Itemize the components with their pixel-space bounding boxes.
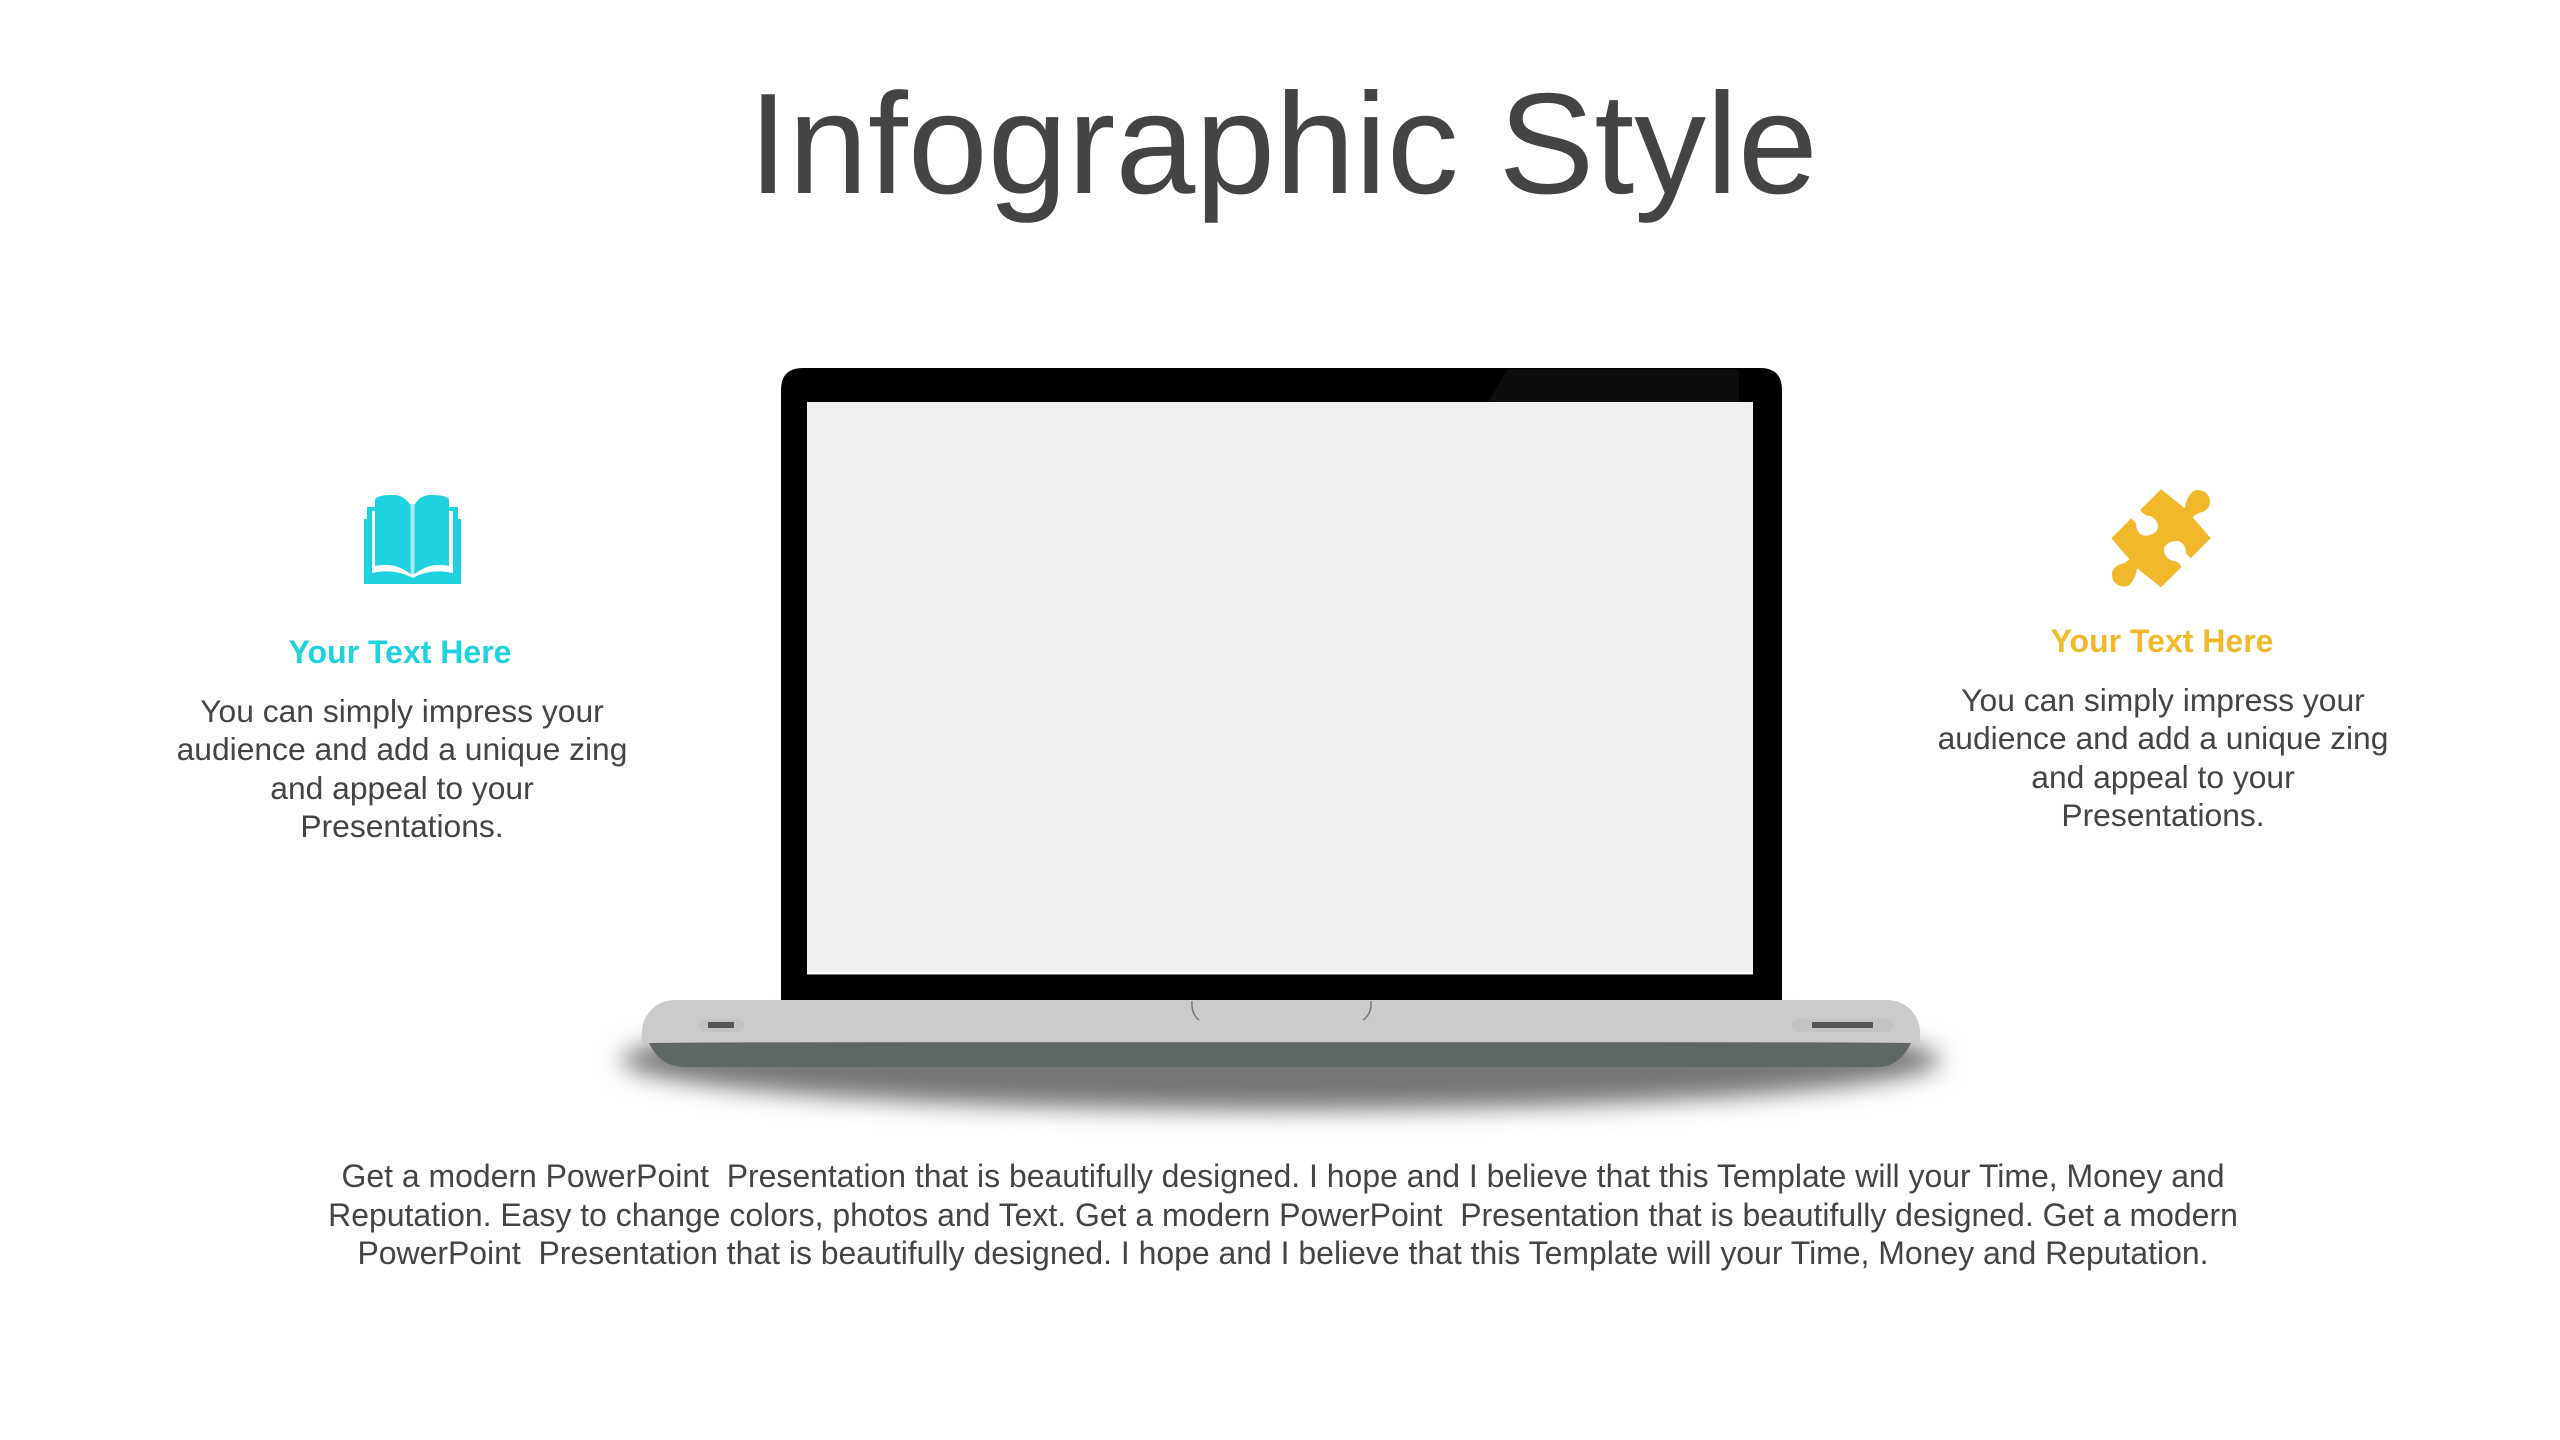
icon: puzzle piece [2111, 489, 2211, 587]
laptop shadow [621, 1010, 1941, 1110]
laptop bezel [781, 368, 1782, 1001]
bezel reflection [1488, 369, 1739, 402]
left text block: Presentations. [300, 808, 504, 844]
bottom text block: PowerPoint Presentation that is beautifully designed. I hope and I believe that this Template will your Time, Money and Reputation. [357, 1235, 2209, 1271]
right port [1792, 1019, 1893, 1032]
left panel [177, 495, 627, 844]
bottom text block: Reputation. Easy to change colors, photos and Text. Get a modern PowerPoint Presentation that is beautifully designed. Get a modern [328, 1197, 2238, 1233]
laptop base top [642, 1000, 1920, 1042]
left text block: You can simply impress your [200, 693, 604, 729]
right text block: You can simply impress your [1961, 682, 2365, 718]
right text block: and appeal to your [2031, 759, 2295, 795]
bottom text block [328, 1158, 2238, 1271]
laptop illustration [621, 368, 1941, 1110]
left text block [177, 693, 627, 844]
left text block: and appeal to your [270, 770, 534, 806]
laptop screen [807, 402, 1753, 975]
right panel [1938, 489, 2388, 833]
icon: open book [364, 495, 461, 584]
right text block [1938, 682, 2388, 833]
right text block: audience and add a unique zing [1938, 720, 2388, 756]
right heading: Your Text Here [2051, 623, 2273, 659]
left text block: audience and add a unique zing [177, 731, 627, 767]
title: Infographic Style [748, 64, 1818, 224]
lid notch [1192, 1001, 1371, 1020]
left port [699, 1019, 744, 1032]
bottom text block: Get a modern PowerPoint Presentation that is beautifully designed. I hope and I believe that this Template will your Time, Money and [341, 1158, 2225, 1194]
right text block: Presentations. [2061, 797, 2265, 833]
laptop base front edge [649, 1043, 1911, 1067]
left heading: Your Text Here [289, 634, 511, 670]
